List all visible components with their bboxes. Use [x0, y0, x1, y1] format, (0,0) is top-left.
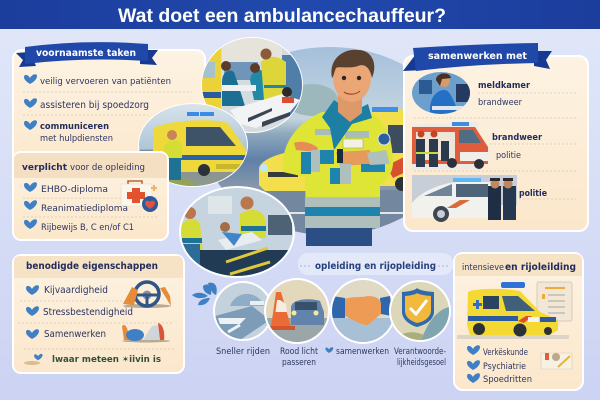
label: Verantwoordelijkheidsgevoel: Verantwoorde-: [394, 347, 446, 357]
banner: voornaamste taken: voornaamste taken: [36, 48, 136, 59]
text: meldkamer: meldkamer: [478, 81, 531, 91]
hair: [331, 50, 374, 78]
item: EHBO-diploma: [24, 182, 108, 195]
icon: leaves: [192, 283, 217, 305]
circle: samenwerken handshake: [330, 278, 396, 344]
item: Psychiatrie: Psychiatrie: [483, 362, 526, 372]
task: veilig vervoeren: veilig vervoeren van patiënten: [40, 77, 171, 87]
text: politie: [519, 189, 576, 199]
panel: benodigde eigenschappen: [13, 255, 184, 373]
illustration: fire truck and firefighters: [412, 122, 490, 170]
header bar with title: [0, 0, 600, 29]
jacket torso: [283, 112, 393, 228]
item: Stressbestendigheid: Stressbestendigheid: [43, 307, 133, 318]
banner: voornaamste taken: [16, 42, 158, 67]
label: samenwerken: samenwerken: [336, 347, 389, 357]
task: communiceren: met hulpdiensten: [40, 134, 113, 144]
circle: verantwoordelijkheidsgevoel shield: [389, 280, 452, 342]
task: veilig vervoeren: [24, 74, 171, 87]
illustration: ambulance: [457, 282, 569, 339]
text: brandweer: politie: [496, 151, 521, 161]
text: politie: politie: [519, 189, 547, 199]
item: Reanimatiediploma: [24, 200, 128, 214]
text: brandweer: brandweer: [492, 133, 543, 143]
panel: samenwerken met: [403, 43, 588, 231]
panel: verplicht voor de opleiding: verplicht: [22, 163, 68, 173]
name tag: [343, 139, 363, 148]
item: Samenwerken: Samenwerken: [44, 329, 106, 340]
task: communiceren: [24, 120, 113, 144]
circle: Rood licht passeren: [264, 278, 330, 344]
collar: [322, 100, 372, 150]
neck: [338, 95, 362, 122]
header bar with title: Wat doet een ambulancechauffeur?: [118, 6, 446, 27]
panel: verplicht voor de opleiding: voor de opleiding: [70, 163, 145, 173]
text: brandweer: [490, 133, 576, 161]
panel: intensieve en rijoleilding: [454, 253, 583, 390]
icon: first aid kit: [121, 181, 158, 212]
text: meldkamer: [478, 81, 576, 108]
task: assisteren: assisteren bij spoedzorg: [40, 100, 149, 111]
banner: samenwerken met: [403, 43, 552, 71]
jacket reflective stripes: [305, 129, 380, 228]
ambulance behind, left: [259, 153, 306, 191]
label: Verantwoordelijkheidsgevoel: [394, 347, 446, 368]
panel: verplicht voor de opleiding: [13, 152, 168, 240]
trousers: [306, 228, 372, 246]
item: Kijvaardigheid: Kijvaardigheid: [44, 285, 108, 296]
icon: teamwork hands: [122, 323, 170, 342]
section heading: opleiding en rijopleiding: [315, 261, 436, 272]
panel: benodigde eigenschappen: benodigde eigenschappen: [26, 261, 158, 272]
item: Rijbewijs: Rijbewijs B, C en/of C1: [41, 223, 134, 233]
crossed arms: [283, 140, 338, 178]
illustration: dispatcher: [412, 72, 470, 114]
section: opleiding en rijopleiding: [298, 253, 453, 275]
item: Verkeskunde: Verkëskunde: [483, 348, 528, 358]
circle: Sneller rijden: [213, 281, 273, 341]
panel heading: [462, 262, 576, 273]
icon: notes and pen: [541, 353, 572, 369]
banner: samenwerken met: samenwerken met: [428, 51, 527, 62]
item: Reanimatiediploma: Reanimatiediploma: [41, 204, 128, 214]
photo circle: caring for patient in ambulance: [178, 186, 296, 280]
label: Verantwoordelijkheidsgevoel: lijkheidsgesoel: [397, 358, 446, 368]
photo circle: ambulance with paramedic: [137, 103, 249, 187]
motto line: lwaar meteen ✶iivin is: [52, 355, 161, 365]
panel: voornaamste taken: [13, 42, 205, 180]
text: meldkamer: brandweer: [478, 98, 522, 108]
central portrait scene: [218, 47, 403, 234]
task: communiceren: communiceren: [40, 122, 109, 132]
illustration: police car and officers: [412, 175, 517, 222]
label: Sneller rijden: Sneller rijden: [216, 347, 270, 357]
icon: steering wheel with hands: [123, 282, 171, 308]
face: [333, 54, 371, 102]
label: Rood licht passeren: [280, 347, 319, 368]
label: Rood licht passeren: Rood licht: [280, 347, 319, 357]
panel heading: intensieve: [462, 263, 504, 273]
item: Spoedritten: Spoedritten: [483, 375, 532, 385]
panel heading: en rijoleilding: [505, 262, 576, 273]
ambulance behind, right: [372, 107, 403, 191]
shoulder badge: [378, 133, 390, 145]
photo circle: transferring patient on stretcher: [200, 37, 304, 133]
label: Rood licht passeren: passeren: [282, 358, 316, 368]
item: Rijbewijs: [24, 219, 134, 233]
item: EHBO-diploma: EHBO-diploma: [41, 185, 108, 195]
illustration: checklist document: [537, 282, 572, 321]
paramedic portrait: [283, 50, 393, 246]
